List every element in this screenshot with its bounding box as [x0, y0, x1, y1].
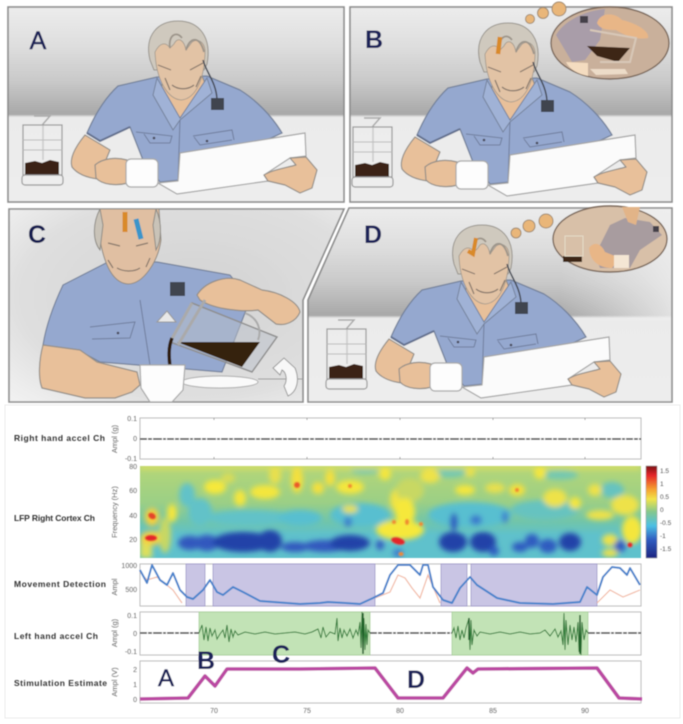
chart row: right hand accelerometer: -0.1: [125, 456, 137, 463]
chart row: LFP spectrogram: 60: [129, 488, 137, 495]
x axis tick labels: 70: [210, 708, 218, 715]
illustration: man reading, panel D: [326, 225, 621, 398]
chart row: movement detection: [14, 563, 641, 606]
panel letter B: B: [365, 26, 383, 54]
electrode: orange, panel B: [498, 37, 500, 54]
panel A: reading at rest: [8, 7, 344, 202]
chart row: right hand accelerometer: 0.1: [127, 416, 137, 423]
coffee cup: [140, 365, 185, 402]
colour scale: 0: [660, 507, 664, 514]
left hand signal: [199, 612, 588, 655]
phase label C: C: [272, 641, 290, 669]
stimulation trace: [140, 668, 642, 699]
chart row: movement detection: 1000: [121, 563, 137, 570]
panel letter A: A: [30, 27, 47, 55]
phase label A: A: [158, 665, 174, 692]
panel C: pouring coffee: [9, 209, 344, 402]
colour scale: -1: [660, 533, 666, 540]
movement detection trace: [140, 565, 640, 604]
row label: movement: Movement Detection: [14, 579, 106, 589]
colour scale: [646, 466, 672, 558]
chart row: left hand accelerometer: [14, 612, 641, 656]
chart row: stimulation estimate: 1: [133, 682, 137, 689]
arrow: tilt direction: [273, 358, 297, 396]
colour scale: 1: [660, 481, 664, 488]
french press, tilted: [169, 300, 277, 372]
row label: left hand: Left hand accel Ch: [14, 631, 98, 641]
thought bubble: cup at rest: [511, 206, 667, 272]
x axis tick labels: 75: [303, 708, 311, 715]
colour scale: 0.5: [660, 494, 669, 501]
phase label B: B: [197, 647, 215, 675]
yellow patches: [140, 466, 640, 469]
colour scale: -0.5: [660, 520, 672, 527]
illustration: man reading, panel B: [352, 23, 647, 196]
red hotspots: [145, 535, 157, 541]
colour scale: 1.5: [660, 468, 669, 475]
illustration: man reading, panel A: [22, 21, 317, 194]
colour scale: -1.5: [660, 546, 672, 553]
movement shaded intervals: [186, 564, 597, 606]
active intervals: [199, 612, 588, 655]
chart row: left hand accelerometer: Ampl (g): [110, 618, 119, 647]
chart row: left hand accelerometer: 0: [133, 631, 137, 638]
chart row: LFP spectrogram: 20: [129, 537, 137, 544]
chart row: movement detection: Ampl: [110, 578, 119, 596]
row label: right hand: Right hand accel Ch: [14, 433, 105, 443]
chart row: right hand accelerometer: [14, 416, 641, 463]
panel D: recalling coffee: [300, 206, 680, 403]
panel letter D: D: [364, 221, 382, 249]
electrode: blue: [136, 219, 141, 239]
electrode: orange: [122, 212, 128, 232]
x axis tick labels: [210, 708, 589, 715]
chart row: LFP spectrogram: 80: [129, 464, 137, 471]
x axis tick labels: 80: [396, 708, 404, 715]
panel letter C: C: [28, 221, 46, 249]
x axis tick labels: 85: [489, 708, 497, 715]
chart row: right hand accelerometer: Ampl (g): [110, 424, 119, 453]
chart row: movement detection: 500: [125, 587, 137, 594]
chart row: left hand accelerometer: 0.1: [127, 613, 137, 620]
chart row: stimulation estimate: Ampl (V): [110, 667, 119, 697]
teal patches: [179, 483, 195, 507]
chart row: LFP spectrogram: 40: [129, 513, 137, 520]
electrode: orange, panel D: [468, 238, 476, 254]
chart row: LFP spectrogram: [14, 464, 672, 558]
chart row: stimulation estimate: 0: [133, 697, 137, 704]
phase label D: D: [407, 666, 425, 694]
chart row: stimulation estimate: [14, 641, 642, 715]
dark blue band: [178, 536, 202, 550]
secondary trace: [140, 572, 640, 603]
x axis tick labels: 90: [581, 708, 589, 715]
row label: LFP: LFP Right Cortex Ch: [14, 513, 95, 523]
chart row: LFP spectrogram: Frequency (Hz): [110, 486, 119, 538]
row label: stimulation: Stimulation Estimate: [14, 678, 107, 688]
chart row: left hand accelerometer: -0.1: [125, 649, 137, 656]
chart row: right hand accelerometer: 0: [133, 436, 137, 443]
chart row: stimulation estimate: 2: [133, 667, 137, 674]
panel B: imagining pouring: [350, 2, 672, 202]
chart frame: [5, 405, 680, 718]
thought bubble: pouring coffee: [526, 2, 669, 79]
illustration: man pouring coffee: [39, 209, 303, 402]
left arm and hand: [39, 345, 140, 398]
